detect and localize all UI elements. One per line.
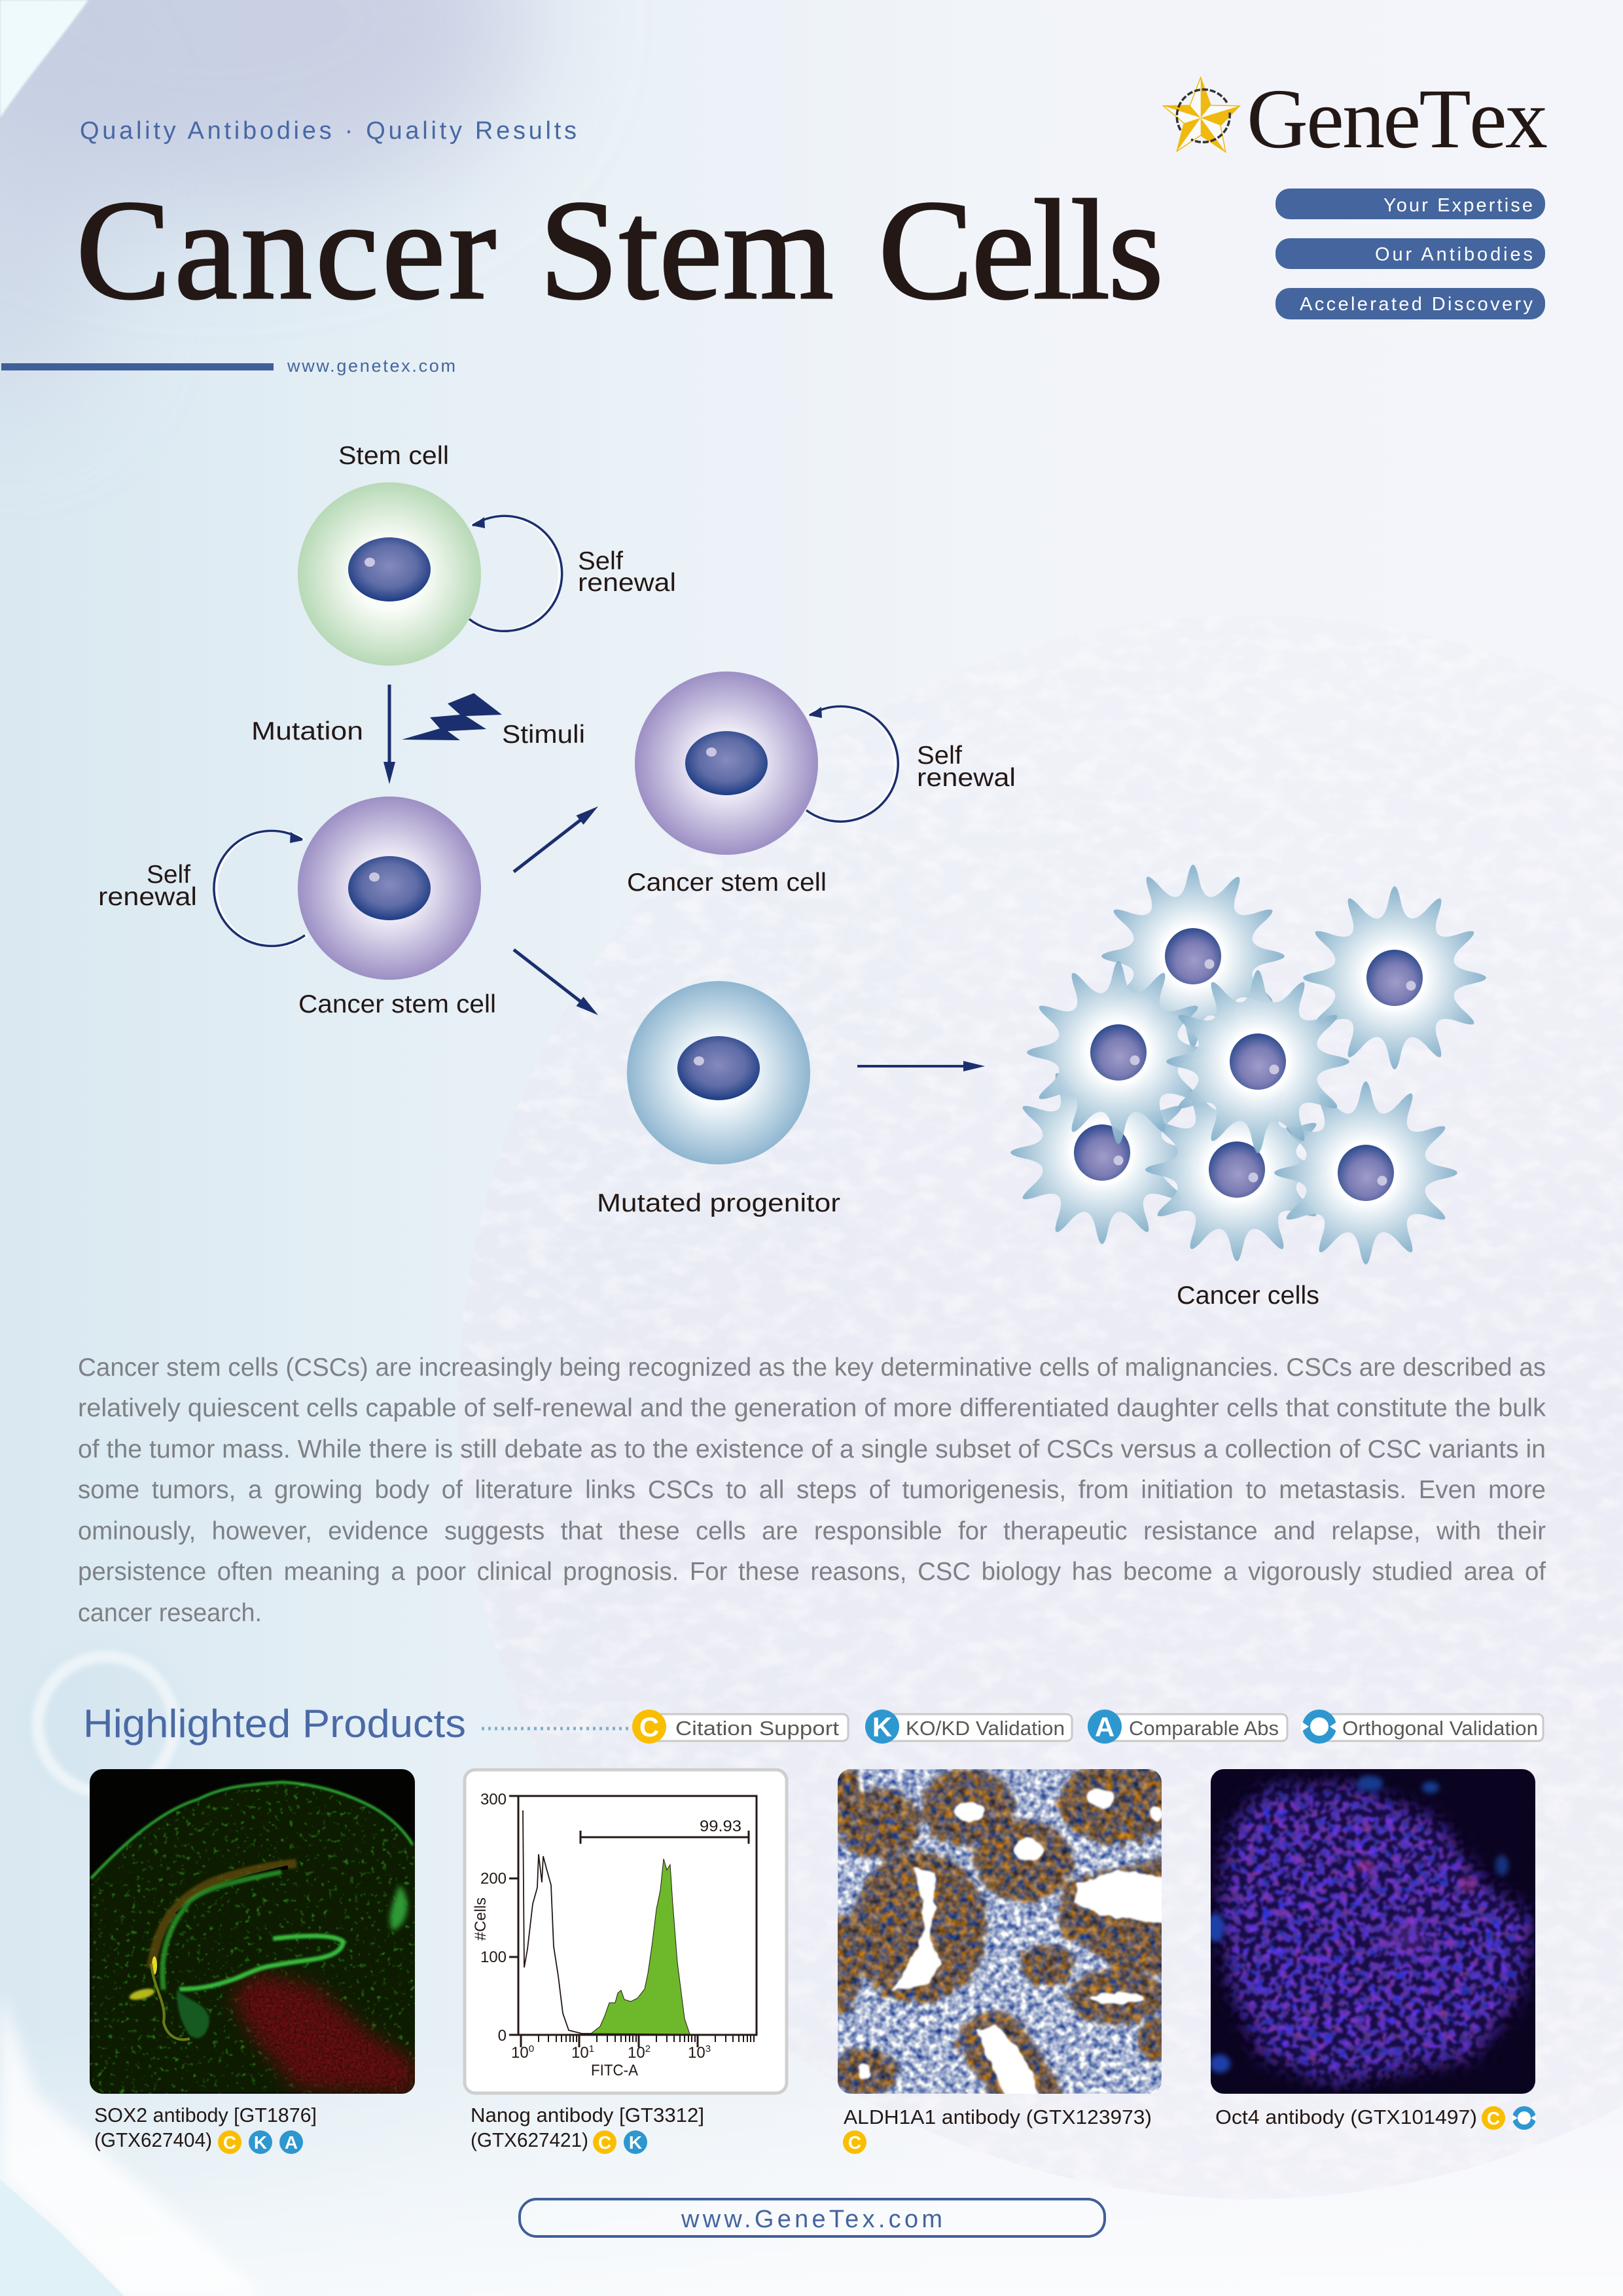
body paragraph: cancer research.	[78, 1599, 262, 1627]
image: Oct4 stem cell colony immunofluorescence	[1206, 1769, 1535, 2094]
caption: SOX2 antibody: C	[223, 2132, 236, 2153]
label: Self renewal (left)	[98, 861, 197, 911]
chart: flow cytometry histogram: 200	[480, 1870, 507, 1888]
legend item: Comparable Abs: A	[1095, 1712, 1115, 1742]
caption: SOX2 antibody: K	[254, 2132, 267, 2153]
chart: flow cytometry histogram: 10	[688, 2044, 705, 2062]
pill: Our Antibodies: Our Antibodies	[1375, 244, 1533, 265]
cancer cell	[1166, 970, 1349, 1153]
caption: Nanog antibody	[471, 2104, 704, 2154]
product panel: ALDH1A1	[827, 1759, 1175, 2154]
legend item: Orthogonal Validation: Orthogonal Validation	[1342, 1717, 1538, 1740]
chart: flow cytometry histogram: 99.93	[700, 1818, 741, 1835]
label: Self renewal (left): renewal	[98, 883, 197, 911]
caption: SOX2 antibody	[94, 2104, 317, 2154]
body paragraph: of the tumor mass. While there is still debate as to the existence of a single subset of CSCs versus a collection of CSC variants in	[78, 1435, 1546, 1463]
chart: flow cytometry histogram: 10	[628, 2044, 645, 2062]
arrow: mutation	[383, 685, 395, 784]
logo wordmark: GeneTex	[1247, 72, 1548, 166]
label: Mutated progenitor: Mutated progenitor	[597, 1189, 840, 1217]
chart: flow cytometry histogram: 300	[480, 1791, 507, 1808]
cancer cell	[1027, 961, 1210, 1144]
chart: flow cytometry histogram: 10	[511, 2044, 529, 2062]
title: Stem	[539, 171, 834, 329]
header rule	[1, 363, 274, 370]
cancer cell	[1101, 865, 1285, 1048]
legend item: Orthogonal Validation	[1301, 1713, 1543, 1741]
caption: Oct4 antibody: Oct4 antibody (GTX101497)	[1215, 2106, 1477, 2128]
legend: validation badges	[632, 1710, 1543, 1744]
icon: lightning bolt	[402, 693, 502, 740]
chart: flow cytometry histogram: 2	[645, 2043, 651, 2054]
legend item: KO/KD Validation: K	[872, 1712, 892, 1742]
product panel: Nanog	[465, 1770, 787, 2154]
chart: flow cytometry histogram: FITC-A	[591, 2062, 638, 2079]
label: Self renewal (right): Self	[917, 742, 962, 770]
body paragraph: some tumors, a growing body of literature links CSCs to all steps of tumorigenesis, from initiation to metastasis. Even more	[78, 1476, 1546, 1504]
label: Mutation: Mutation	[251, 717, 363, 745]
cancer cell cluster	[1010, 865, 1486, 1265]
arrow: to cancer cells	[857, 1061, 985, 1071]
body paragraph: ominously, however, evidence suggests that these cells are responsible for therapeutic resistance and relapse, with their	[78, 1517, 1546, 1545]
product panel: SOX2	[90, 1769, 419, 2154]
title: Cancer	[76, 171, 496, 329]
label: Self renewal (stem cell): Self	[578, 547, 623, 575]
label: Self renewal (stem cell)	[578, 547, 676, 597]
cancer cell	[1010, 1061, 1194, 1244]
website small: www.genetex.com	[287, 356, 455, 376]
cancer cell	[1145, 1078, 1329, 1261]
label: Cancer cells: Cancer cells	[1177, 1282, 1319, 1310]
title: Cells	[878, 171, 1164, 329]
arrow: to cancer stem cell	[514, 806, 598, 872]
caption: Nanog antibody: (GTX627421)	[471, 2128, 588, 2151]
caption: Nanog antibody: C	[598, 2132, 611, 2153]
arrow: to mutated progenitor	[514, 950, 598, 1015]
legend item: Citation Support	[632, 1710, 848, 1744]
image: SOX2 brain section immunofluorescence	[90, 1769, 419, 2094]
caption: Nanog antibody: Nanog antibody [GT3312]	[471, 2104, 704, 2126]
pill: Accelerated Discovery	[1275, 288, 1545, 319]
pill: Your Expertise	[1275, 188, 1545, 219]
caption: ALDH1A1 antibody: ALDH1A1 antibody (GTX123973)	[844, 2106, 1152, 2128]
logo: GeneTex	[1163, 72, 1548, 166]
cancer stem cell (lower)	[298, 797, 481, 980]
legend item: Comparable Abs	[1088, 1710, 1287, 1744]
self renewal arrow: right cancer stem cell	[804, 706, 898, 821]
label: Cancer stem cell (lower): Cancer stem cell	[298, 990, 496, 1018]
footer website pill	[520, 2199, 1105, 2236]
chart: flow cytometry histogram: 0	[498, 2027, 507, 2045]
chart: flow cytometry histogram: 10	[571, 2044, 589, 2062]
label: Self renewal (left): Self	[147, 861, 190, 889]
image: ALDH1A1 tissue immunohistochemistry	[838, 1769, 1162, 2094]
stem cell	[298, 482, 481, 666]
diagram: cancer stem cell hierarchy	[98, 442, 1486, 1310]
caption: SOX2 antibody: A	[285, 2132, 298, 2153]
mutated progenitor cell	[627, 981, 810, 1164]
caption: Oct4 antibody: C	[1487, 2108, 1500, 2128]
legend item: Comparable Abs: Comparable Abs	[1129, 1717, 1279, 1740]
pill: Accelerated Discovery: Accelerated Discovery	[1300, 294, 1533, 315]
body paragraph: relatively quiescent cells capable of self-renewal and the generation of more differentiated daughter cells that constitute the bulk	[78, 1394, 1546, 1422]
legend item: KO/KD Validation: KO/KD Validation	[906, 1717, 1065, 1740]
self renewal arrow: stem cell	[467, 516, 562, 631]
cancer cell	[1274, 1081, 1457, 1265]
cancer stem cell (right)	[635, 672, 818, 855]
pill: Our Antibodies	[1275, 238, 1545, 269]
chart: flow cytometry histogram: 3	[705, 2043, 711, 2054]
label: Self renewal (right)	[917, 742, 1016, 792]
body paragraph: Cancer stem cells (CSCs) are increasingly being recognized as the key determinative cells of malignancies. CSCs are described as	[78, 1354, 1546, 1382]
label: Stimuli: Stimuli	[502, 721, 585, 749]
label: Self renewal (right): renewal	[917, 764, 1016, 792]
body paragraph: persistence often meaning a poor clinical prognosis. For these reasons, CSC biology has become a vigorously studied area of	[78, 1558, 1546, 1586]
card background	[465, 1770, 787, 2093]
label: Stem cell: Stem cell	[338, 442, 449, 470]
icon: gold star with DNA ring	[1163, 77, 1240, 152]
chart: flow cytometry histogram: 1	[589, 2043, 594, 2054]
caption: Nanog antibody: K	[629, 2132, 642, 2153]
chart: flow cytometry histogram: #Cells	[472, 1897, 490, 1941]
title	[76, 171, 1164, 329]
tagline: Quality Antibodies · Quality Results	[80, 117, 577, 145]
self renewal arrow: left cancer stem cell	[214, 831, 307, 946]
cancer cell	[1303, 886, 1486, 1069]
pill: Your Expertise: Your Expertise	[1383, 195, 1533, 216]
body paragraph	[78, 1354, 1546, 1627]
caption: ALDH1A1 antibody	[843, 2106, 1152, 2154]
dotted leader	[482, 1727, 632, 1731]
caption: SOX2 antibody: SOX2 antibody [GT1876]	[94, 2104, 317, 2126]
caption: ALDH1A1 antibody: C	[848, 2132, 861, 2153]
legend item: KO/KD Validation	[865, 1710, 1072, 1744]
heading: Highlighted Products: Highlighted Products	[83, 1702, 466, 1746]
footer website pill: www.GeneTex.com	[681, 2206, 942, 2233]
label: Self renewal (stem cell): renewal	[578, 569, 676, 597]
slogan pills	[1275, 188, 1545, 319]
legend item: Citation Support: C	[639, 1712, 659, 1742]
label: Cancer stem cell (right): Cancer stem cell	[627, 869, 827, 897]
chart: flow cytometry histogram: 0	[529, 2043, 534, 2054]
chart: flow cytometry histogram: 100	[480, 1948, 507, 1966]
legend item: Citation Support: Citation Support	[675, 1717, 839, 1740]
caption: SOX2 antibody: (GTX627404)	[94, 2128, 212, 2151]
chart: flow cytometry histogram	[472, 1791, 757, 2079]
product panel: Oct4	[1206, 1769, 1536, 2130]
